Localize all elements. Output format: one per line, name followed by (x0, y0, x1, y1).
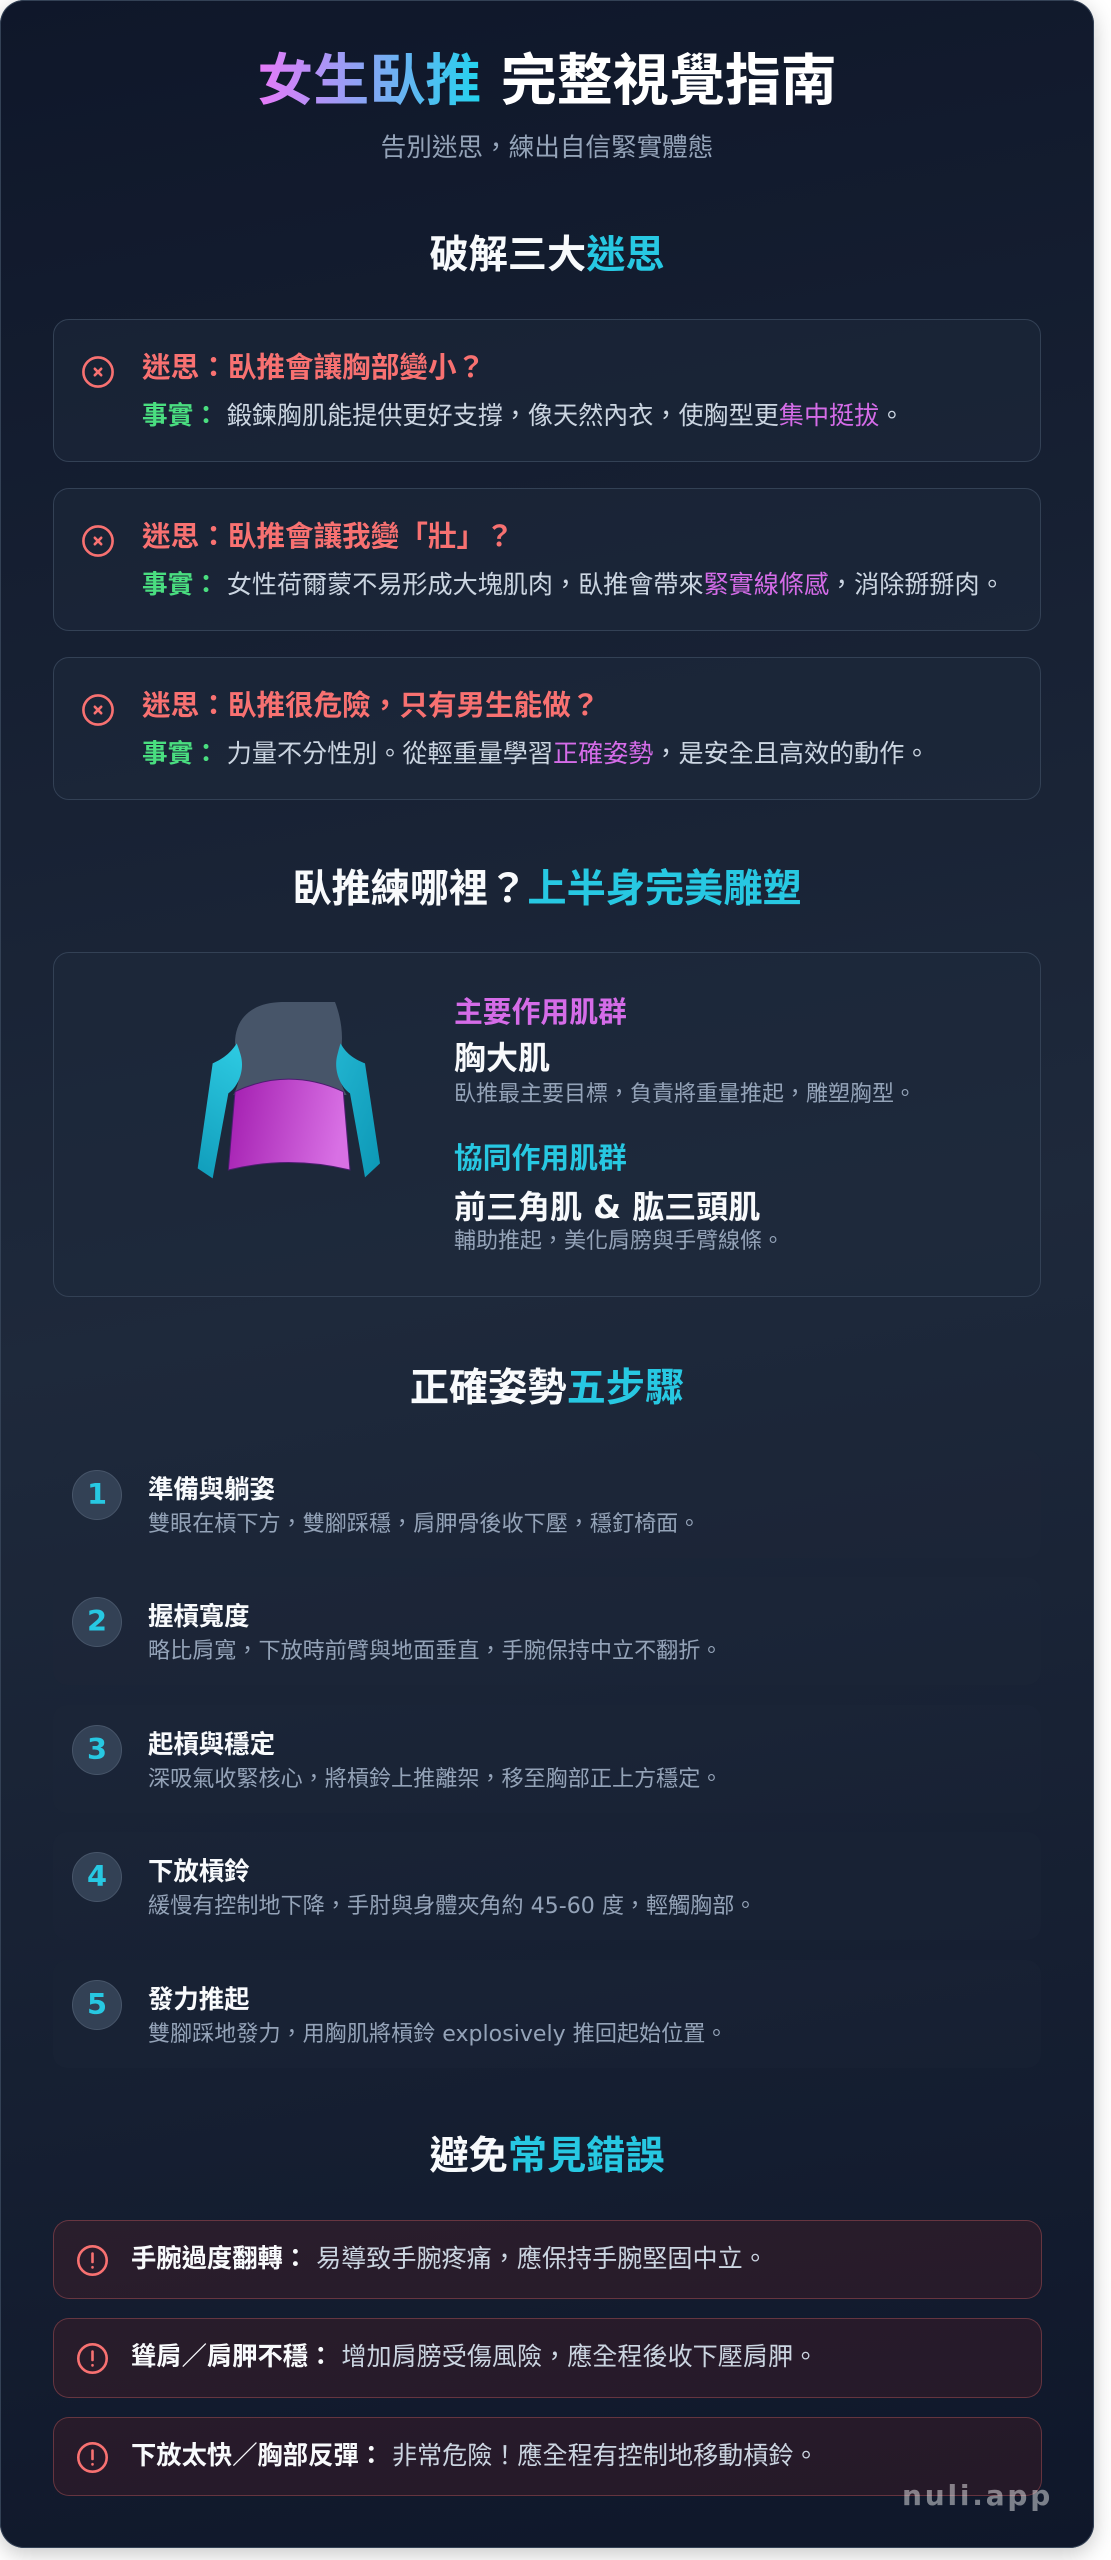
title: 女生臥推 完整視覺指南 (257, 49, 837, 114)
step 5 number: 5 (87, 1987, 107, 2021)
step 3 title: 起槓與穩定 (148, 1729, 275, 1759)
panel: mistake 2 (53, 2318, 1042, 2398)
panel: step 5 (53, 1960, 1041, 2068)
mistake 1 text: 手腕過度翻轉： 易導致手腕疼痛，應保持手腕堅固中立。 (131, 2244, 768, 2273)
right arm muscle (336, 1043, 380, 1177)
myth 2 fact: 事實： 女性荷爾蒙不易形成大塊肌肉，臥推會帶來緊實線條感，消除掰掰肉。 (142, 570, 1005, 600)
torso (233, 1002, 347, 1095)
step 5 number (72, 1980, 122, 2030)
watermark: nuli.app (902, 2479, 1053, 2512)
step 1 description: 雙眼在槓下方，雙腳踩穩，肩胛骨後收下壓，穩釘椅面。 (148, 1511, 700, 1537)
heading: mistakes: 避免常見錯誤 (429, 2134, 665, 2179)
primary muscle label: 主要作用肌群 (454, 995, 627, 1029)
panel: step 3 (53, 1705, 1041, 1813)
icon: torso muscle diagram (198, 1002, 380, 1178)
icon: alert circle (77, 2245, 108, 2276)
step 2 number (72, 1597, 122, 1647)
heading: myths: 破解三大迷思 (429, 233, 665, 278)
panel: myth 2 (53, 488, 1041, 631)
panel: step 2 (53, 1577, 1041, 1685)
secondary muscle name: 前三角肌 & 肱三頭肌 (454, 1188, 760, 1226)
icon: x circle (82, 694, 114, 726)
step 2 number: 2 (87, 1604, 107, 1638)
icon: alert circle (77, 2343, 108, 2374)
step 4 title: 下放槓鈴 (148, 1856, 250, 1886)
step 4 number: 4 (87, 1859, 107, 1893)
panel: step 1 (53, 1450, 1041, 1558)
step 1 number (72, 1470, 122, 1520)
step 2 title: 握槓寬度 (148, 1601, 250, 1631)
step 4 description: 緩慢有控制地下降，手肘與身體夾角約 45-60 度，輕觸胸部。 (148, 1893, 756, 1919)
secondary muscle label: 協同作用肌群 (454, 1141, 627, 1175)
myth 2 title: 迷思：臥推會讓我變「壯」？ (142, 519, 514, 553)
icon: x circle (82, 525, 114, 557)
panel: myth 1 (53, 319, 1041, 462)
subtitle: 告別迷思，練出自信緊實體態 (381, 133, 713, 163)
myth 1 fact: 事實： 鍛鍊胸肌能提供更好支撐，像天然內衣，使胸型更集中挺拔。 (142, 401, 904, 431)
icon: alert circle (77, 2442, 108, 2473)
primary muscle name: 胸大肌 (454, 1039, 550, 1077)
step 1 number: 1 (87, 1477, 107, 1511)
step 5 description: 雙腳踩地發力，用胸肌將槓鈴 explosively 推回起始位置。 (148, 2021, 727, 2047)
panel: mistake 3 (53, 2417, 1042, 2496)
icon: x circle (82, 356, 114, 388)
step 3 number: 3 (87, 1732, 107, 1766)
myth 1 title: 迷思：臥推會讓胸部變小？ (142, 350, 485, 384)
heading: muscles: 臥推練哪裡？上半身完美雕塑 (292, 867, 802, 912)
step 4 number (72, 1852, 122, 1902)
panel: step 4 (53, 1832, 1041, 1940)
step 1 title: 準備與躺姿 (148, 1474, 275, 1504)
panel: mistake 1 (53, 2220, 1042, 2299)
mistake 2 text: 聳肩／肩胛不穩： 增加肩膀受傷風險，應全程後收下壓肩胛。 (131, 2342, 818, 2371)
pectoral muscle (228, 1079, 350, 1170)
step 3 number (72, 1725, 122, 1775)
panel: muscle groups (53, 952, 1041, 1297)
heading: steps: 正確姿勢五步驟 (410, 1366, 684, 1411)
primary muscle description: 臥推最主要目標，負責將重量推起，雕塑胸型。 (454, 1082, 916, 1107)
myth 3 fact: 事實： 力量不分性別。從輕重量學習正確姿勢，是安全且高效的動作。 (142, 739, 929, 769)
step 3 description: 深吸氣收緊核心，將槓鈴上推離架，移至胸部正上方穩定。 (148, 1766, 722, 1792)
step 5 title: 發力推起 (148, 1984, 250, 2014)
secondary muscle description: 輔助推起，美化肩膀與手臂線條。 (454, 1229, 784, 1254)
myth 3 title: 迷思：臥推很危險，只有男生能做？ (142, 688, 600, 722)
left arm muscle (198, 1043, 242, 1178)
step 2 description: 略比肩寬，下放時前臂與地面垂直，手腕保持中立不翻折。 (148, 1638, 722, 1664)
mistake 3 text: 下放太快／胸部反彈： 非常危險！應全程有控制地移動槓鈴。 (131, 2441, 819, 2470)
panel: myth 3 (53, 657, 1041, 800)
